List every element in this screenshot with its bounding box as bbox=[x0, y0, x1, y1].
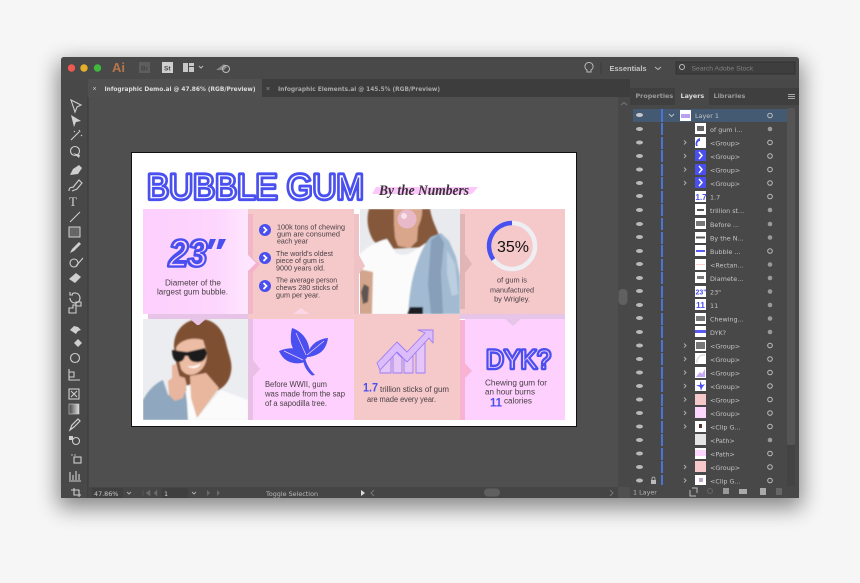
text: trillion caption: are made every year. bbox=[367, 395, 436, 404]
bullet 2: piece of gum is bbox=[276, 256, 324, 265]
layer row: Rectangle bbox=[636, 259, 772, 271]
layers panel: Properties bbox=[636, 92, 673, 100]
layer row: 1.7: 1.7 bbox=[696, 193, 707, 202]
layer row: Path: <Path> bbox=[710, 437, 735, 445]
layer row: Group: <Group> bbox=[710, 396, 740, 404]
bullet 2: The world's oldest bbox=[276, 249, 334, 258]
title bar bbox=[61, 57, 799, 79]
panel: diameter bbox=[143, 209, 248, 314]
heading: Bubble Gum: BUBBLE GUM bbox=[147, 168, 364, 207]
layer row: Group bbox=[636, 177, 772, 189]
layer row: Group: <Group> bbox=[710, 410, 740, 418]
layer row: Group bbox=[636, 394, 772, 406]
layers footer: 1 Layer bbox=[633, 488, 657, 496]
layer row: Path: <Path> bbox=[710, 450, 735, 458]
subheading: By the Numbers: By the Numbers bbox=[378, 183, 469, 199]
text: sapodilla caption: of a sapodilla tree. bbox=[265, 399, 327, 408]
layer row: locked Clip Group bbox=[636, 475, 772, 486]
layer row: Path bbox=[636, 434, 772, 446]
title bar: Ai bbox=[112, 60, 125, 75]
document tabs bbox=[61, 79, 630, 97]
layer row: Rectangle: <Rectan... bbox=[710, 262, 744, 270]
layer row: Group bbox=[636, 353, 772, 365]
status bar: 47.86% bbox=[94, 490, 118, 498]
layer row: Group: <Group> bbox=[710, 140, 740, 148]
layer row: Layer 1 bbox=[633, 109, 787, 122]
text: sapodilla caption: was made from the sap bbox=[264, 390, 346, 398]
layer row: Group bbox=[636, 380, 772, 392]
layer row: Group: <Group> bbox=[710, 370, 740, 378]
layer row: 11: 11 bbox=[696, 300, 705, 310]
layer row: By the N... bbox=[636, 232, 772, 244]
layer row: Before ...: Before ... bbox=[710, 221, 739, 229]
layer row: Chewing...: Chewing... bbox=[710, 316, 744, 324]
title bar: Br bbox=[141, 66, 149, 72]
bullet 2 bbox=[259, 249, 334, 272]
photo: woman blowing bubble bbox=[354, 209, 460, 314]
layer row: trillion st...: trillion st... bbox=[710, 207, 744, 215]
heading: Bubble Gum: BUBBLE GUM bbox=[147, 168, 364, 207]
text: diameter caption: Diameter of the bbox=[165, 278, 222, 288]
layer row: 23 inches: 23" bbox=[696, 290, 707, 296]
layer row: 11: 11 bbox=[710, 302, 718, 310]
stripe: photo frame left bbox=[354, 214, 365, 314]
panel: sapodilla leaf bbox=[248, 309, 354, 420]
layer row: trillion st... bbox=[636, 204, 772, 216]
layer row: Group: <Group> bbox=[710, 166, 740, 174]
panel: trillion sticks bbox=[354, 314, 460, 420]
heading: DYK?: DYK? bbox=[486, 344, 551, 374]
bullet 3: The average person bbox=[276, 276, 337, 284]
panel: wrigley donut bbox=[460, 209, 565, 314]
text: wrigley caption bbox=[490, 276, 534, 304]
title bar: Search Adobe Stock bbox=[692, 66, 754, 72]
layer row: Group bbox=[636, 164, 772, 176]
layer row: Bubble ... bbox=[636, 245, 772, 257]
artboard bbox=[132, 152, 576, 426]
layer row: Group bbox=[636, 367, 772, 379]
stripe: arrow right of trillion panel bbox=[460, 320, 472, 420]
layer row: DYK? bbox=[636, 326, 772, 338]
title bar: Essentials bbox=[610, 64, 647, 73]
text: calories caption: 11 bbox=[490, 396, 502, 410]
bullet 3: gum per year. bbox=[276, 290, 320, 300]
layers footer bbox=[630, 486, 799, 498]
bullet 1 bbox=[259, 222, 345, 246]
layer row: 1.7: 1.7 bbox=[710, 194, 720, 202]
bullet 1: gum are consumed bbox=[277, 230, 340, 238]
layer row: of gum i... bbox=[636, 123, 772, 135]
layer row: Group: <Group> bbox=[710, 464, 740, 472]
document tabs: Infographic Elements.ai @ 145.5% (RGB/Preview) bbox=[278, 85, 440, 93]
layer row: Group bbox=[636, 137, 772, 149]
text: diameter caption bbox=[157, 278, 228, 296]
layer row: locked Clip Group: <Clip G... bbox=[710, 478, 741, 486]
panel: did you know bbox=[460, 309, 565, 420]
layer row: Group bbox=[636, 340, 772, 352]
layer row: Group bbox=[636, 150, 772, 162]
layer row: Bubble ...: Bubble ... bbox=[710, 248, 740, 256]
layer row: Group: <Group> bbox=[710, 342, 740, 350]
text: calories caption: an hour burns bbox=[485, 388, 535, 396]
layers panel: Libraries bbox=[714, 92, 745, 100]
bullet 3: chews 280 sticks of bbox=[276, 283, 339, 292]
photo: woman with sunglasses bbox=[143, 314, 248, 420]
layer row: Layer 1: Layer 1 bbox=[695, 112, 719, 120]
layer row: Chewing... bbox=[636, 313, 772, 325]
document tabs: Infographic Demo.ai @ 47.86% (RGB/Preview) bbox=[104, 85, 256, 93]
layer row: Group: <Group> bbox=[710, 180, 740, 188]
text: sapodilla caption: Before WWII, gum bbox=[265, 380, 327, 389]
layer row: Group bbox=[636, 407, 772, 419]
layer row: 23 inches bbox=[636, 286, 772, 298]
panel: facts list bbox=[248, 209, 354, 314]
divider: band under top row left bbox=[148, 314, 253, 325]
layer row: Diamete...: Diamete... bbox=[710, 275, 743, 283]
text: trillion caption bbox=[363, 380, 449, 404]
document tabs: × bbox=[92, 86, 97, 93]
heading: DYK?: DYK? bbox=[486, 344, 551, 374]
bullet 1: 100k tons of chewing bbox=[277, 222, 345, 232]
text: trillion caption: 1.7 bbox=[363, 380, 378, 394]
layer row: By the N...: By the N... bbox=[710, 234, 744, 242]
status bar: 1 bbox=[164, 490, 168, 498]
layer row: 23 inches: 23" bbox=[710, 288, 721, 296]
layer row: Clip Group bbox=[636, 421, 772, 433]
icon: growth chart bbox=[377, 330, 433, 373]
text: calories caption: Chewing gum for bbox=[485, 378, 547, 388]
text: trillion caption: trillion sticks of gum bbox=[380, 385, 449, 394]
layer row: Path bbox=[636, 448, 772, 460]
text: calories caption: calories bbox=[504, 396, 532, 406]
bullet 3 bbox=[259, 276, 339, 300]
tools panel: T bbox=[69, 194, 77, 209]
tools panel bbox=[61, 79, 88, 498]
layer row: Diamete... bbox=[636, 272, 772, 284]
text: calories caption bbox=[485, 378, 547, 410]
layer row: Group: <Group> bbox=[710, 356, 740, 364]
layer row: Before ... bbox=[636, 218, 772, 230]
heading: 23 inches: 23 bbox=[168, 233, 207, 274]
status bar: Toggle Selection bbox=[265, 490, 318, 498]
layer row: 1.7 bbox=[636, 191, 772, 203]
icon: leaves bbox=[279, 328, 328, 376]
text: wrigley caption: manufactured bbox=[490, 286, 534, 294]
heading: 23 inches: 23 bbox=[168, 233, 207, 274]
layer row: Clip Group: <Clip G... bbox=[710, 424, 741, 432]
text: wrigley caption: by Wrigley. bbox=[494, 294, 530, 304]
layer row: Group: <Group> bbox=[710, 383, 740, 391]
title bar: St bbox=[164, 66, 171, 72]
document tabs: × bbox=[266, 86, 270, 93]
donut chart: 35%: 35% bbox=[497, 239, 529, 256]
layer row: Group bbox=[636, 461, 772, 473]
layer row: DYK?: DYK? bbox=[710, 329, 726, 337]
text: wrigley caption: of gum is bbox=[497, 276, 527, 284]
window shadow bbox=[58, 62, 802, 508]
application window bbox=[61, 57, 799, 498]
stripe: photo frame right bbox=[460, 214, 465, 314]
bullet 1: each year bbox=[277, 236, 308, 246]
canvas scrollbars bbox=[88, 97, 630, 498]
status bar bbox=[92, 488, 613, 498]
layers panel: Layers bbox=[680, 92, 704, 100]
text: sapodilla caption bbox=[264, 380, 346, 408]
layer row: of gum i...: of gum i... bbox=[710, 126, 742, 134]
text: diameter caption: largest gum bubble. bbox=[157, 288, 228, 296]
bullet 2: 9000 years old. bbox=[276, 264, 325, 272]
layer row: Group: <Group> bbox=[710, 153, 740, 161]
layers panel bbox=[630, 79, 799, 498]
layer row: 11 bbox=[636, 299, 772, 311]
